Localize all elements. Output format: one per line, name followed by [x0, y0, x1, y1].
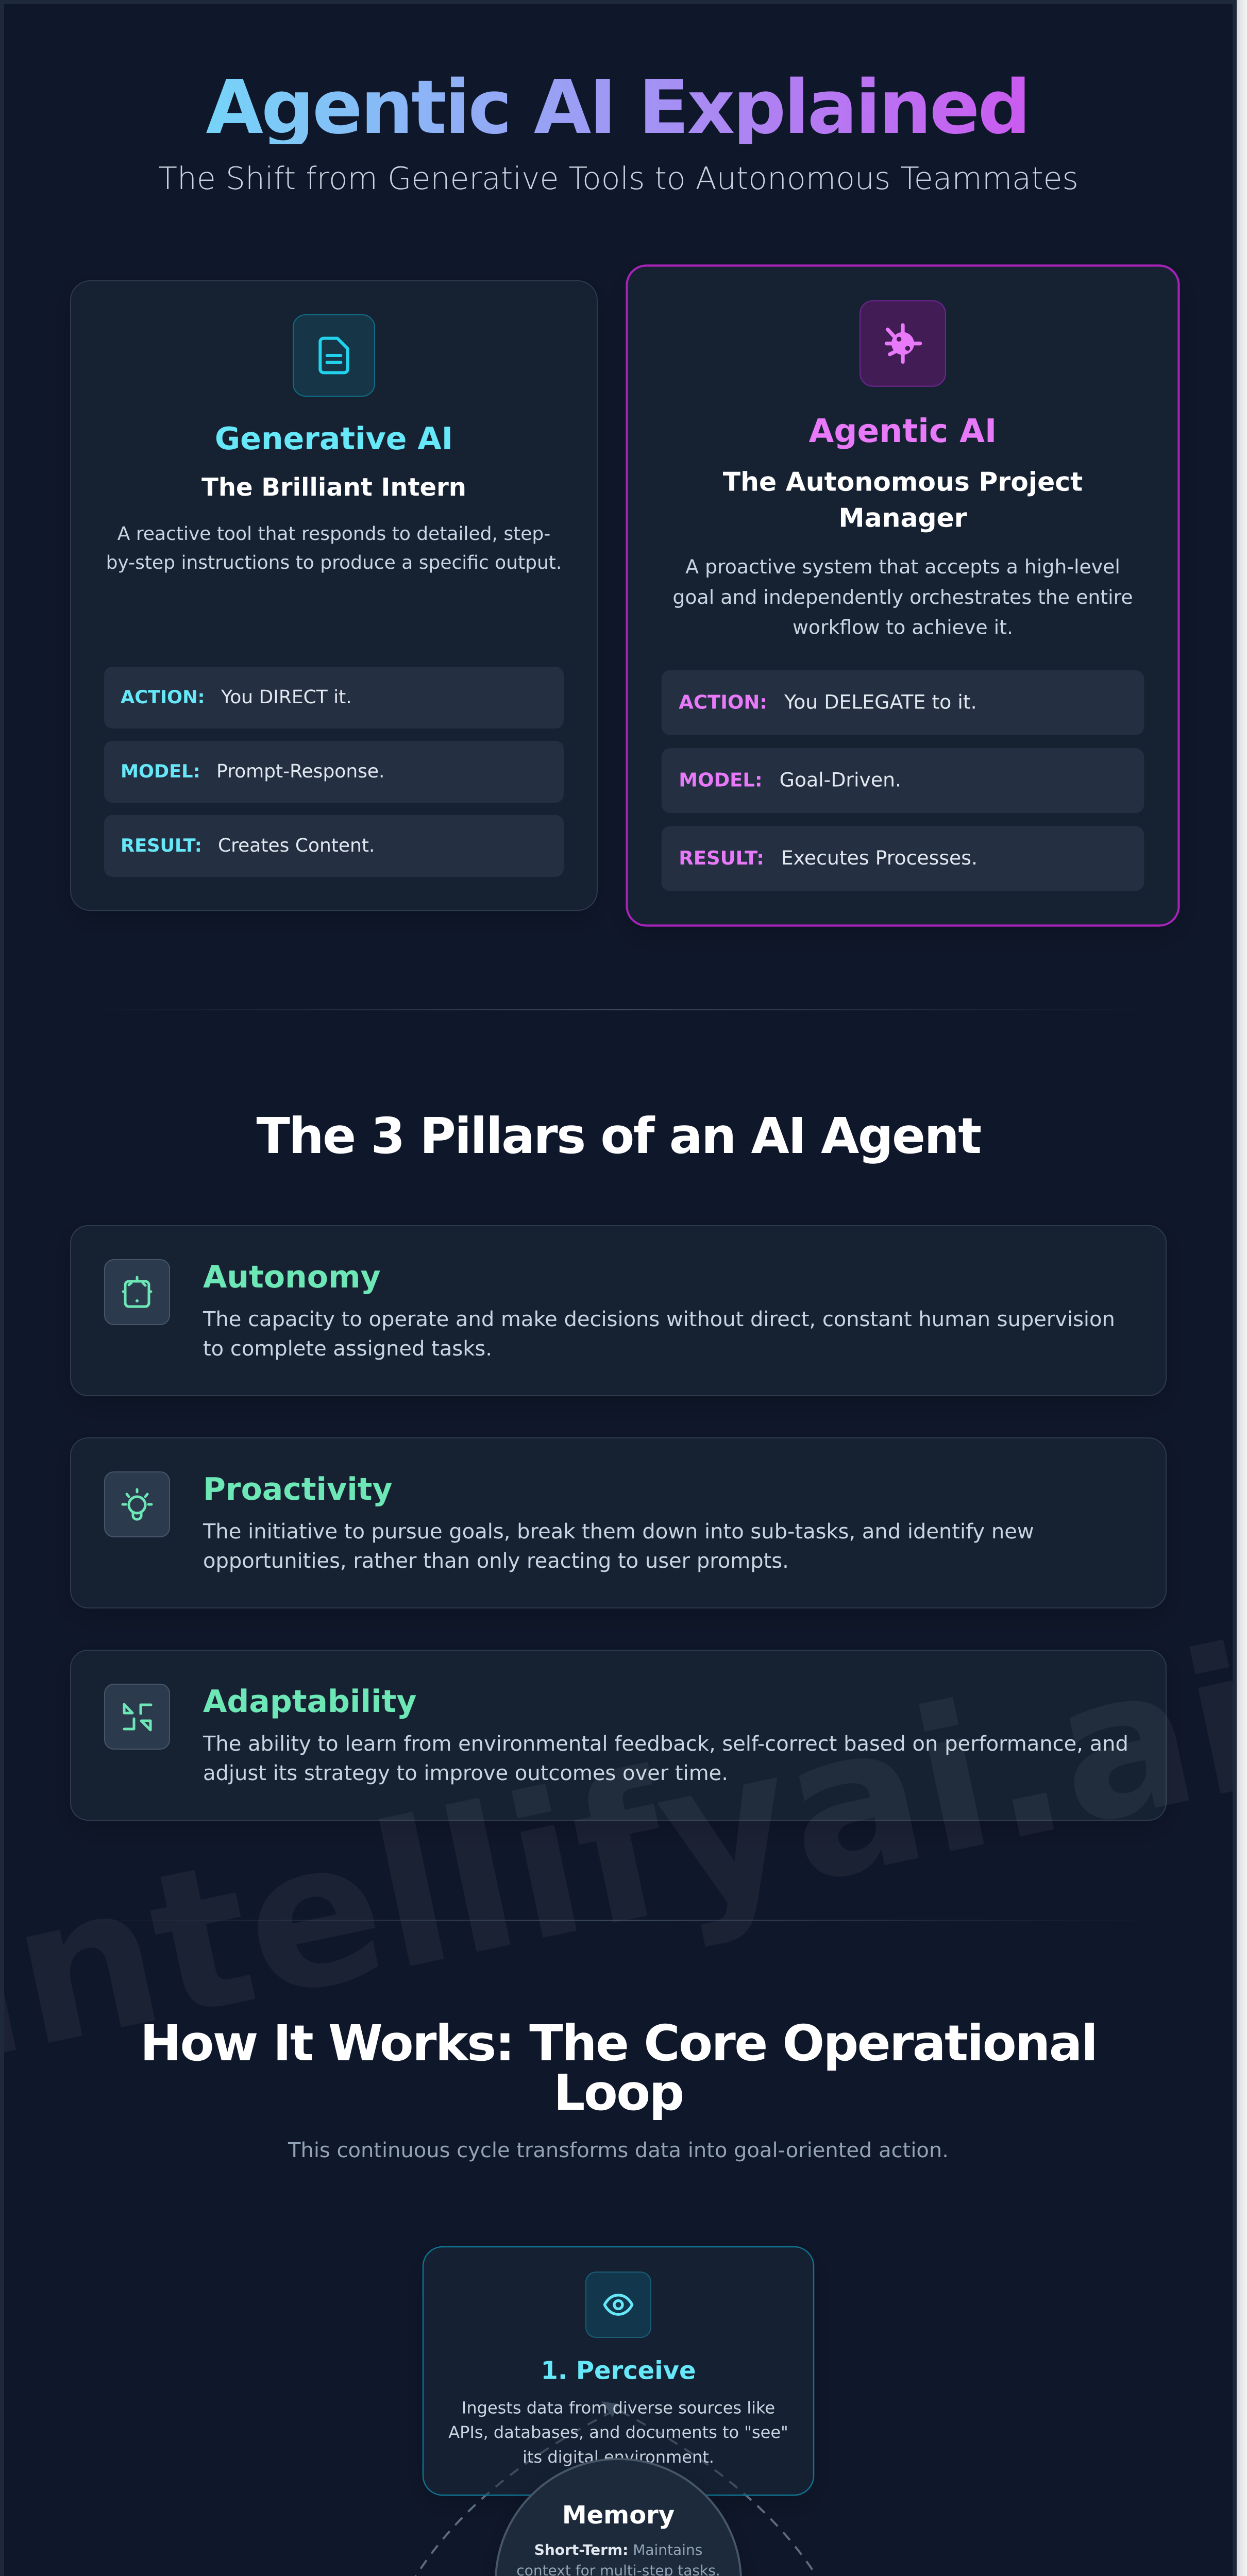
- row: action: [662, 670, 1144, 735]
- icon: adapt arrows: [105, 1684, 170, 1749]
- diagram: core loop: [174, 2247, 1063, 2576]
- heading: how it works: How It Works: The Core Operational: [140, 2014, 1097, 2072]
- icon: autonomy: [105, 1260, 170, 1325]
- panel: agentic AI: [627, 266, 1179, 926]
- memory hub: [496, 2459, 741, 2576]
- icon: document: [293, 315, 375, 396]
- row: model: MODEL:: [679, 769, 763, 791]
- subheading: Manager: [838, 503, 967, 533]
- icon: eye: [586, 2272, 651, 2337]
- row: result: [662, 826, 1144, 891]
- description: its digital environment.: [523, 2447, 714, 2467]
- row: model: [104, 741, 564, 803]
- row: model: Goal-Driven.: [780, 769, 901, 791]
- row: result: RESULT:: [679, 847, 764, 869]
- description: The initiative to pursue goals, break them down into sub-tasks, and identify new: [203, 1520, 1034, 1544]
- row: action: ACTION:: [679, 691, 767, 714]
- heading: Generative AI: [215, 421, 453, 457]
- description: workflow to achieve it.: [793, 617, 1013, 639]
- panel: autonomy: [71, 1226, 1166, 1396]
- panel: generative AI: [71, 281, 597, 910]
- row: result: [104, 815, 564, 877]
- row: model: MODEL:: [121, 761, 200, 782]
- row: model: Prompt-Response.: [216, 761, 384, 782]
- panel: proactivity: [71, 1438, 1166, 1608]
- section subtitle: This continuous cycle transforms data into goal-oriented action.: [288, 2139, 949, 2162]
- description: The capacity to operate and make decisions without direct, constant human supervision: [203, 1308, 1115, 1331]
- row: model: [662, 748, 1144, 813]
- memory text: Short-Term:: [534, 2541, 628, 2558]
- description: The ability to learn from environmental feedback, self-correct based on performance, and: [203, 1732, 1128, 1756]
- description: APIs, databases, and documents to "see": [448, 2422, 788, 2442]
- icon: light bulb: [105, 1472, 170, 1537]
- description: opportunities, rather than only reacting to user prompts.: [203, 1549, 789, 1573]
- description: A proactive system that accepts a high-level: [685, 556, 1120, 578]
- row: action: [104, 667, 564, 728]
- step: perceive: [423, 2247, 814, 2495]
- heading: Memory: [562, 2501, 675, 2530]
- memory text: Maintains: [633, 2541, 702, 2558]
- subheading: The Brilliant Intern: [201, 473, 466, 502]
- heading: Adaptability: [203, 1684, 416, 1720]
- row: action: You DELEGATE to it.: [784, 691, 977, 714]
- description: to complete assigned tasks.: [203, 1337, 492, 1361]
- heading: Autonomy: [203, 1259, 381, 1295]
- description: by-step instructions to produce a specific output.: [106, 552, 562, 573]
- row: action: ACTION:: [121, 687, 205, 708]
- row: action: You DIRECT it.: [221, 687, 352, 708]
- arrow: act to perceive: [601, 2401, 867, 2576]
- panel: adaptability: [71, 1650, 1166, 1820]
- icon: agent network: [860, 301, 946, 386]
- arrow: perceive to reason: [364, 2411, 613, 2576]
- description: A reactive tool that responds to detailed, step-: [117, 523, 550, 545]
- row: result: Creates Content.: [218, 835, 375, 856]
- description: goal and independently orchestrates the entire: [672, 586, 1133, 608]
- description: Ingests data from diverse sources like: [462, 2398, 775, 2417]
- description: adjust its strategy to improve outcomes over time.: [203, 1761, 728, 1785]
- title: Agentic AI Explained: [206, 64, 1029, 150]
- heading: 1. Perceive: [541, 2357, 696, 2385]
- heading: Proactivity: [203, 1471, 393, 1507]
- heading: Agentic AI: [809, 412, 997, 450]
- subheading: The Autonomous Project: [723, 467, 1083, 497]
- heading: pillars: The 3 Pillars of an AI Agent: [256, 1107, 981, 1165]
- row: result: Executes Processes.: [781, 847, 978, 869]
- heading: how it works: Loop: [553, 2064, 683, 2122]
- subtitle: The Shift from Generative Tools to Autonomous Teammates: [158, 161, 1079, 197]
- row: result: RESULT:: [121, 835, 202, 856]
